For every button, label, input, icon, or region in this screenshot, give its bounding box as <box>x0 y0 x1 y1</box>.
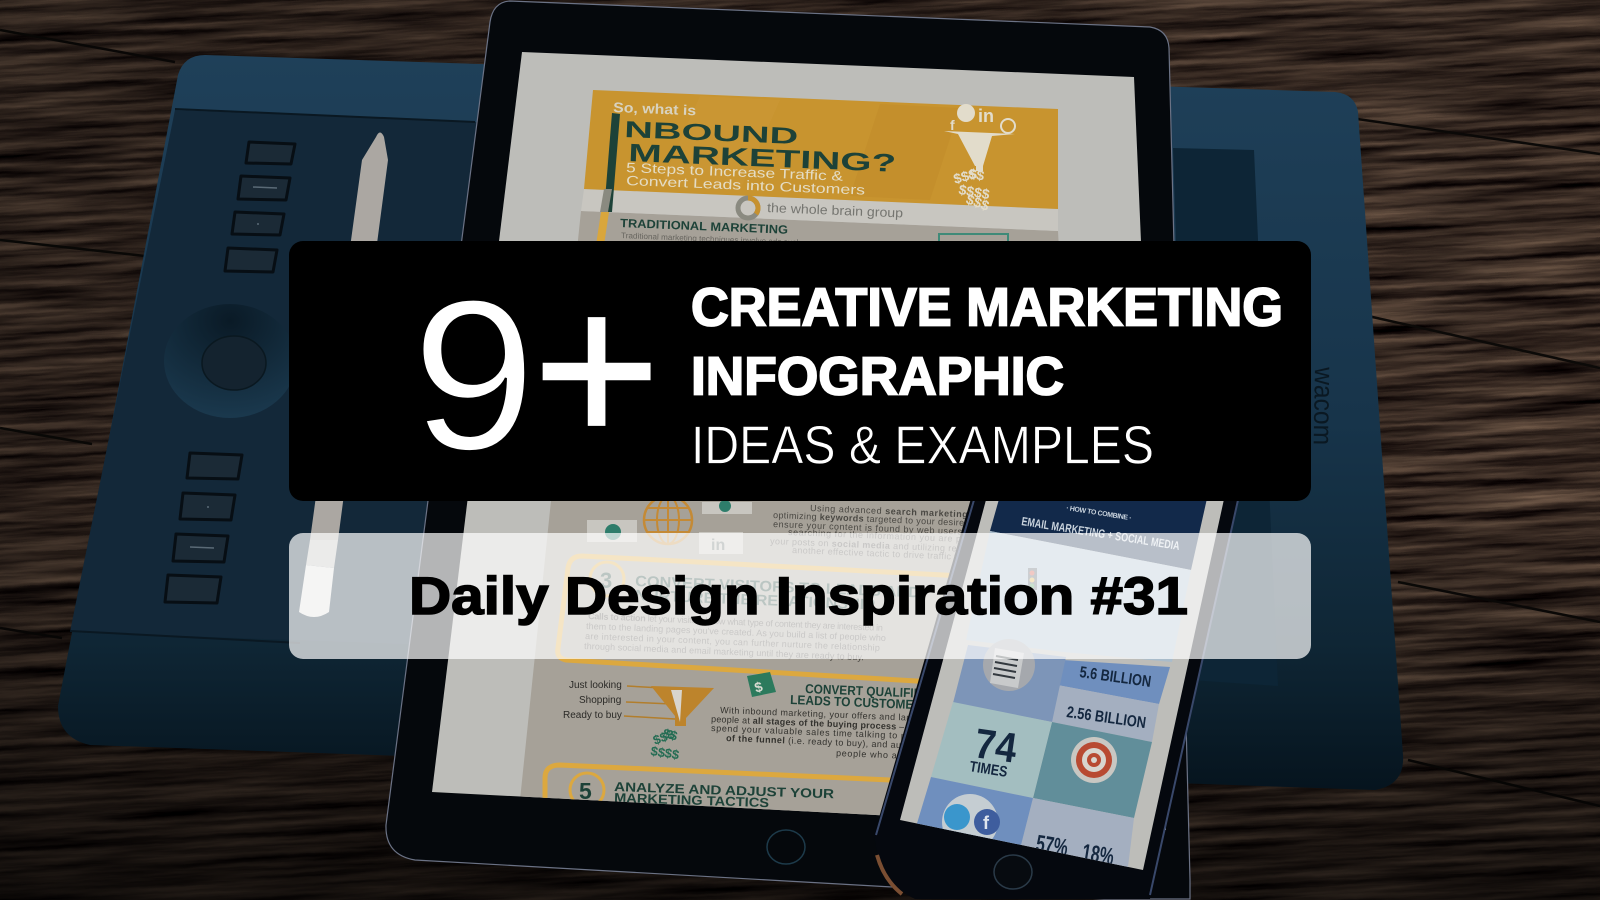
funnel stages: $$ <box>649 743 667 761</box>
step 5 box: ANALYZE AND ADJUST YOUR <box>614 779 835 801</box>
paragraph: inbound marketing: people who are <box>836 748 906 761</box>
icons: traffic light and target <box>942 568 1117 850</box>
header: navy <box>990 501 1206 570</box>
globe icon and social tiles <box>587 496 752 554</box>
paragraph: inbound marketing: of the funnel (i.e. ready to buy), and automate <box>726 733 931 751</box>
funnel stages: $$ <box>661 725 680 744</box>
funnel stages <box>563 680 714 763</box>
funnel stages: Ready to buy <box>563 710 622 721</box>
title text: INFOGRAPHIC <box>691 346 1064 406</box>
funnel stages: Just looking <box>569 680 622 691</box>
phone stats: TIMES <box>968 758 1009 781</box>
smartphone <box>874 485 1240 899</box>
timeline bar <box>600 189 612 212</box>
logo: the whole brain group: the whole brain group <box>767 200 903 220</box>
phone home button <box>994 855 1032 889</box>
phone heading: · HOW TO COMBINE · <box>1066 505 1132 522</box>
paragraph: search marketing: your posts on social media and utilizing relevan <box>770 536 980 554</box>
icon: green price tag <box>747 672 776 697</box>
funnel stages: $$$ <box>651 726 677 748</box>
phone heading: EMAIL MARKETING + SOCIAL MEDIA <box>1021 514 1181 553</box>
panel: intro block <box>990 531 1190 662</box>
large tablet device <box>386 1 1190 899</box>
icon: social funnel: $$$ <box>964 191 992 214</box>
big number 9+: + <box>533 248 660 491</box>
paragraph: search marketing: optimizing keywords targeted to your desired au <box>773 510 983 528</box>
funnel stages: Shopping <box>579 695 621 706</box>
icons: traffic light and target: f <box>983 813 990 833</box>
icon: social funnel: $$$ <box>952 165 979 187</box>
icon: social funnel: $$ <box>967 165 986 184</box>
panel: logo band <box>581 189 1058 231</box>
heading: convert leads: LEADS TO CUSTOMERS <box>790 692 931 713</box>
phone stats: 57% <box>1034 830 1070 862</box>
step 3 box: through social media and email marketing until they are ready to buy. <box>584 641 864 662</box>
icon: social funnel: f <box>950 117 955 133</box>
globe icon and social tiles: in <box>711 537 725 554</box>
step 5 box <box>542 762 890 808</box>
heading: convert leads <box>790 684 916 709</box>
heading: convert leads: CONVERT QUALIFIED <box>805 681 930 701</box>
infographic on tablet screen: Traditional marketing techniques involve ads such <box>621 231 801 247</box>
title text: CREATIVE MARKETING <box>691 278 1283 338</box>
icon: green price tag: $ <box>753 678 764 696</box>
paragraph: inbound marketing: people at all stages of the buying process – which <box>711 714 931 733</box>
paragraph: search marketing: another effective tactic to drive traffic to <box>792 545 962 562</box>
icon: social funnel: $$$$ <box>957 181 991 202</box>
phone stats: 18% <box>1080 839 1116 871</box>
cells <box>915 645 1170 875</box>
panel: orange banner: NBOUND <box>624 116 799 149</box>
step 3 box: CONVERT VISITORS TO LEADS AND <box>635 573 920 601</box>
paragraph: inbound marketing: spend your valuable sales time talking to people <box>711 723 931 742</box>
panel: orange banner: So, what is <box>613 99 697 118</box>
stylus pen <box>299 132 388 617</box>
logo: the whole brain group <box>738 198 903 220</box>
phone heading <box>1021 505 1181 553</box>
icon: social funnel: in <box>978 106 994 126</box>
panel: orange banner: MARKETING? <box>628 139 897 178</box>
phone stats <box>968 664 1152 871</box>
paragraph: search marketing <box>770 504 967 560</box>
funnel stages: $$ <box>663 745 681 763</box>
step 5 box: MARKETING TACTICS <box>614 790 770 810</box>
title text: IDEAS & EXAMPLES <box>691 416 1154 476</box>
paragraph: search marketing: ensure your content is found by web users who <box>773 519 983 537</box>
panel: beige body <box>520 211 1090 840</box>
phone stats: 5.6 BILLION <box>1078 664 1152 691</box>
heading: traditional marketing: TRADITIONAL MARKETING <box>620 216 788 237</box>
phone stats: 2.56 BILLION <box>1065 704 1147 732</box>
paragraph: inbound marketing: With inbound marketing, your offers and landing <box>720 705 930 723</box>
paragraph: search marketing: Using advanced search marketing tech <box>810 503 990 520</box>
paragraph: search marketing: searching for the information you are provid <box>788 527 983 545</box>
step 3 box: are interested in your content, you can further nurture the relationship <box>585 631 880 653</box>
panel: orange banner <box>584 90 1058 214</box>
step 3 box <box>555 554 950 684</box>
title text <box>691 278 1283 476</box>
icon: social funnel <box>944 104 1015 214</box>
paragraph: inbound marketing <box>711 706 908 758</box>
tablet dial <box>164 304 296 418</box>
panel: orange banner: Convert Leads into Customers <box>626 173 866 198</box>
infographic on tablet screen <box>520 90 1090 850</box>
wacom logo: wacom <box>1308 366 1339 445</box>
step 3 box: Calls to action let your visitors know what type of content they are interested in <box>588 611 883 633</box>
panel: translucent subtitle banner <box>289 533 1311 659</box>
subtitle text: Daily Design Inspiration #31 <box>409 567 1188 626</box>
step 3 box: 3 <box>600 568 612 593</box>
phone stats: 74 <box>972 719 1020 772</box>
panel: orange banner: 5 Steps to Increase Traffic & <box>626 160 843 184</box>
panel: black title banner <box>289 241 1311 501</box>
step 5 box: 5 <box>579 778 592 804</box>
infographic on phone screen <box>915 485 1210 875</box>
step 3 box: them to the landing pages you've created. As you build a list of people who <box>586 621 886 643</box>
big number 9+ <box>412 248 660 495</box>
drawing tablet <box>58 55 1403 790</box>
tablet express keys <box>165 142 295 603</box>
big number 9+: 9 <box>412 256 536 495</box>
step 3 box: NURTURE THE RELATIONSHIP <box>635 587 875 614</box>
